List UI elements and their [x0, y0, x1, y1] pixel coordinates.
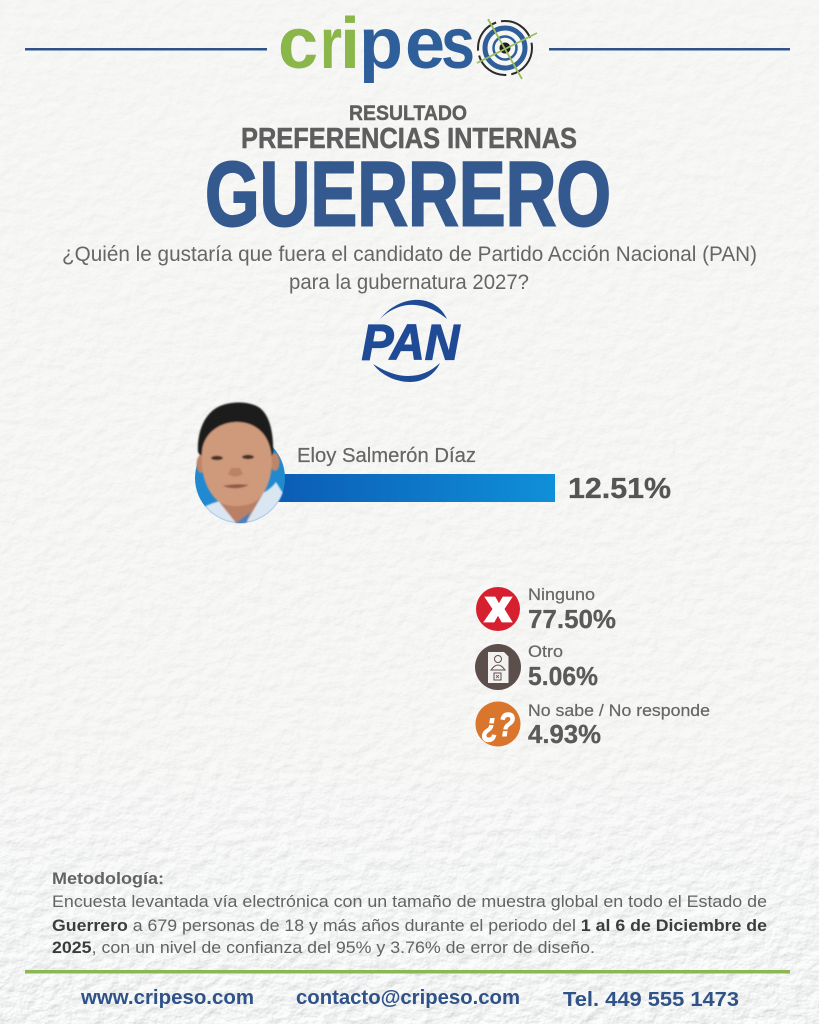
- eyes: [211, 456, 223, 460]
- icon: red X: [476, 587, 520, 631]
- icon: ballot: [475, 644, 521, 690]
- face: [202, 422, 272, 506]
- logo wordmark: [278, 4, 475, 84]
- logo: PAN: PAN: [362, 314, 460, 370]
- header rule right: [549, 48, 790, 50]
- footer rule: [25, 970, 790, 974]
- heading: RESULTADO: RESULTADO: [349, 101, 467, 125]
- label: Otro: [528, 642, 563, 661]
- methodology heading: Metodología:: [52, 870, 164, 888]
- logo wordmark: i: [340, 4, 360, 84]
- hair: [198, 402, 273, 462]
- logo wordmark: e: [405, 4, 445, 84]
- label: No sabe / No responde: [528, 701, 710, 720]
- footer: email: contacto@cripeso.com: [296, 987, 520, 1009]
- logo: cripeso: [278, 4, 537, 84]
- value: 77.50%: [528, 604, 616, 634]
- candidate portrait: [195, 402, 286, 530]
- logo wordmark: s: [441, 4, 475, 84]
- logo: PAN: [362, 300, 460, 382]
- question text: para la gubernatura 2027?: [289, 271, 529, 294]
- footer: website: www.cripeso.com: [80, 987, 254, 1009]
- question text: ¿Quién le gustaría que fuera el candidato de Partido Acción Nacional (PAN): [62, 243, 757, 266]
- methodology line 3: 2025, con un nivel de confianza del 95% y 3.76% de error de diseño.: [52, 939, 595, 957]
- methodology line 1: Encuesta levantada vía electrónica con un tamaño de muestra global en todo el Estado de: [52, 893, 767, 911]
- mouth: [223, 484, 249, 488]
- nose: [228, 468, 243, 476]
- methodology text block: [52, 870, 767, 957]
- methodology line 2: Guerrero a 679 personas de 18 y más años durante el periodo del 1 al 6 de Diciembre de: [52, 917, 767, 935]
- value: 12.51%: [568, 473, 671, 505]
- legend: Otro: [475, 642, 598, 691]
- title: GUERRERO: GUERRERO: [205, 144, 611, 246]
- logo wordmark: r: [320, 4, 342, 84]
- logo wordmark: p: [359, 4, 403, 84]
- header rule left: [25, 48, 267, 50]
- heading: PREFERENCIAS INTERNAS: PREFERENCIAS INTERNAS: [241, 123, 577, 155]
- value: 5.06%: [528, 661, 598, 691]
- footer: phone: Tel. 449 555 1473: [563, 989, 739, 1011]
- ears: [196, 455, 206, 473]
- logo wordmark: c: [278, 4, 318, 84]
- question text: [62, 243, 757, 294]
- bar row: Eloy Salmerón Díaz: [195, 402, 671, 530]
- icon: question marks: [476, 702, 520, 746]
- icon: question marks: ¿?: [482, 706, 515, 743]
- value: 4.93%: [528, 719, 601, 749]
- candidate name: Eloy Salmerón Díaz: [297, 445, 476, 467]
- bar: [276, 474, 555, 502]
- logo target icon: [477, 19, 537, 79]
- legend: No sabe / No responde: [476, 701, 710, 749]
- label: Ninguno: [528, 585, 595, 604]
- legend: Ninguno: [476, 585, 616, 634]
